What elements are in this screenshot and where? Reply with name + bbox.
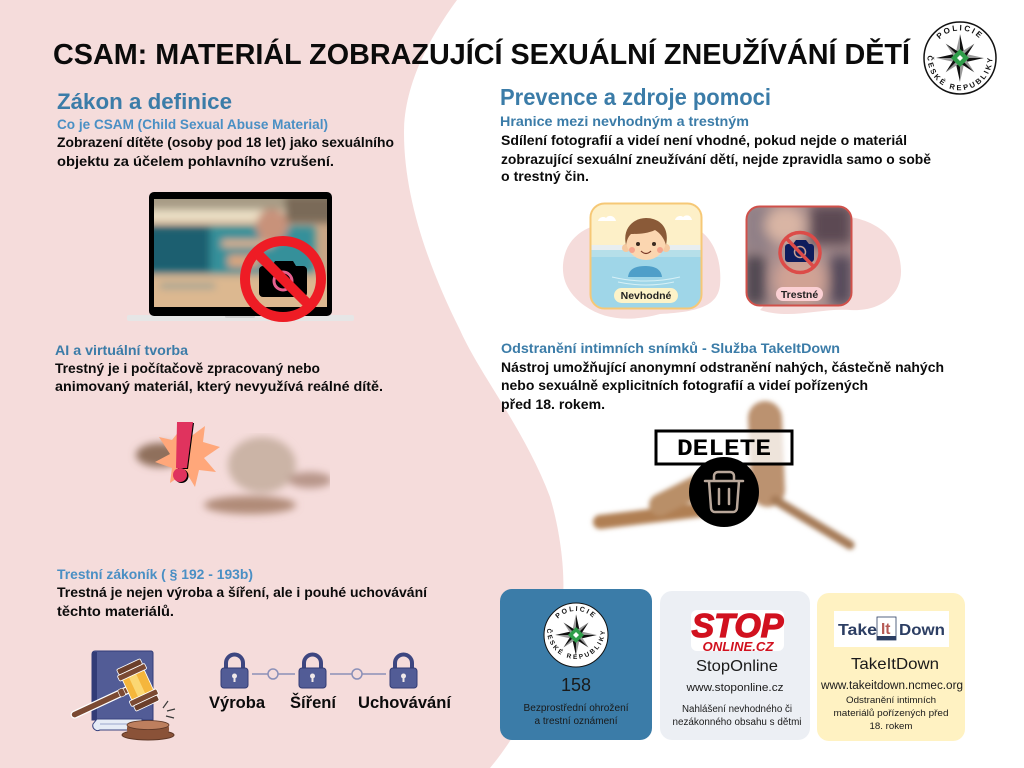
icon: cartoon head above water <box>622 218 670 277</box>
decorative blob behind left card <box>563 222 720 319</box>
icon: police seal: POLICIE <box>936 24 982 39</box>
card: StopOnline: Nahlášení nevhodného či <box>682 704 792 715</box>
text block: removing intimate images: Nástroj umožňující anonymní odstranění nahých, částečně nahých <box>501 359 944 375</box>
card: StopOnline <box>660 591 810 740</box>
card: police 158 <box>500 589 652 740</box>
text block: boundary between inappropriate and criminal <box>500 113 931 184</box>
text block: AI and virtual content: AI a virtuální tvorba <box>55 342 188 358</box>
card: TakeItDown <box>817 593 965 741</box>
logo: StopOnline: ONLINE.CZ <box>702 639 775 654</box>
card: inappropriate example <box>590 204 702 308</box>
icon: crossed camera <box>780 232 820 272</box>
icon: lock 1 <box>221 654 248 688</box>
icon: book and gavel <box>65 651 175 740</box>
diagram: three padlocks with connectors <box>209 654 452 712</box>
button: delete <box>656 431 792 464</box>
logo: StopOnline: STOP <box>692 607 785 644</box>
text block: criminal code: Trestná je nejen výroba a šíření, ale i pouhé uchovávání <box>57 584 428 600</box>
icon: police seal <box>923 21 997 95</box>
icon: police seal small <box>544 602 608 668</box>
text block: boundary between inappropriate and criminal: Hranice mezi nevhodným a trestným <box>500 113 749 129</box>
card: police 158: a trestní oznámení <box>534 716 618 727</box>
label: distribution: Šíření <box>290 693 337 712</box>
text block: boundary between inappropriate and criminal: o trestný čin. <box>501 168 589 184</box>
text block: removing intimate images: Odstranění intimních snímků - Služba TakeItDown <box>501 340 840 356</box>
icon: trash can <box>689 457 759 527</box>
text block: AI and virtual content: animovaný materiál, který nevyužívá reálné dítě. <box>55 378 383 394</box>
card: TakeItDown: 18. rokem <box>870 721 913 732</box>
text block: boundary between inappropriate and criminal: zobrazující sexuální zneužívání dětí, nejde zpravidla samo o sobě <box>501 151 931 167</box>
card: police 158: 158 <box>561 675 591 695</box>
logo: TakeItDown <box>834 611 949 647</box>
icon: police seal small: ČESKÉ REPUBLIKY <box>547 628 605 659</box>
text block: what is CSAM: Co je CSAM (Child Sexual Abuse Material) <box>57 116 328 132</box>
label: storage: Uchovávání <box>358 694 452 712</box>
icon: laptop with crossed camera <box>127 190 354 321</box>
heading: law and definition: Zákon a definice <box>57 89 232 114</box>
card: police 158: Bezprostřední ohrožení <box>524 703 629 714</box>
card: StopOnline: StopOnline <box>696 658 778 675</box>
card: TakeItDown: materiálů pořízených před <box>834 708 948 719</box>
badge: inappropriate: Nevhodné <box>621 290 672 302</box>
icon: lock 3 <box>390 654 417 688</box>
image: abstract blurred area with warning <box>136 422 332 514</box>
icon: lock 2 <box>299 654 326 688</box>
card: criminal example <box>745 205 852 306</box>
text block: what is CSAM <box>57 116 394 169</box>
card: TakeItDown: www.takeitdown.ncmec.org <box>820 680 963 692</box>
title: CSAM: MATERIÁL ZOBRAZUJÍCÍ SEXUÁLNÍ ZNEUŽÍVÁNÍ DĚTÍ <box>53 37 911 71</box>
text block: criminal code: Trestní zákoník ( § 192 - 193b) <box>57 566 253 582</box>
decorative blob behind right card <box>760 217 901 314</box>
card: StopOnline: www.stoponline.cz <box>685 682 784 694</box>
text block: what is CSAM: objektu za účelem pohlavního vzrušení. <box>57 153 334 169</box>
logo: TakeItDown: It <box>881 621 890 638</box>
text block: removing intimate images: před 18. rokem. <box>501 396 605 412</box>
logo: TakeItDown: Down <box>899 622 945 639</box>
text block: AI and virtual content: Trestný je i počítačově zpracovaný nebo <box>55 360 320 376</box>
text block: removing intimate images: nebo sexuálně explicitních fotografií a videí pořízených <box>501 377 868 393</box>
card: TakeItDown: Odstranění intimních <box>846 695 936 706</box>
logo: TakeItDown: Take <box>838 622 877 639</box>
badge: criminal: Trestné <box>781 289 818 301</box>
image: abstract blurred smear with delete button <box>600 418 850 545</box>
text block: AI and virtual content <box>55 342 383 394</box>
heading: prevention and help: Prevence a zdroje pomoci <box>500 84 771 110</box>
text block: what is CSAM: Zobrazení dítěte (osoby pod 18 let) jako sexuálního <box>57 134 394 150</box>
text block: removing intimate images <box>501 340 944 412</box>
card: StopOnline: nezákonného obsahu s dětmi <box>672 717 802 728</box>
background: pink curved panel <box>0 0 563 768</box>
icon: warning burst <box>155 422 220 487</box>
card: TakeItDown: TakeItDown <box>851 656 939 673</box>
label: production: Výroba <box>209 694 266 712</box>
text block: boundary between inappropriate and criminal: Sdílení fotografií a videí není vhodné, pokud nejde o materiál <box>501 132 907 148</box>
icon: police seal small: POLICIE <box>555 606 596 618</box>
icon: police seal: ČESKÉ REPUBLIKY <box>928 56 992 90</box>
button: delete: DELETE <box>677 436 771 462</box>
text block: criminal code: těchto materiálů. <box>57 603 174 619</box>
text block: criminal code <box>57 566 428 619</box>
